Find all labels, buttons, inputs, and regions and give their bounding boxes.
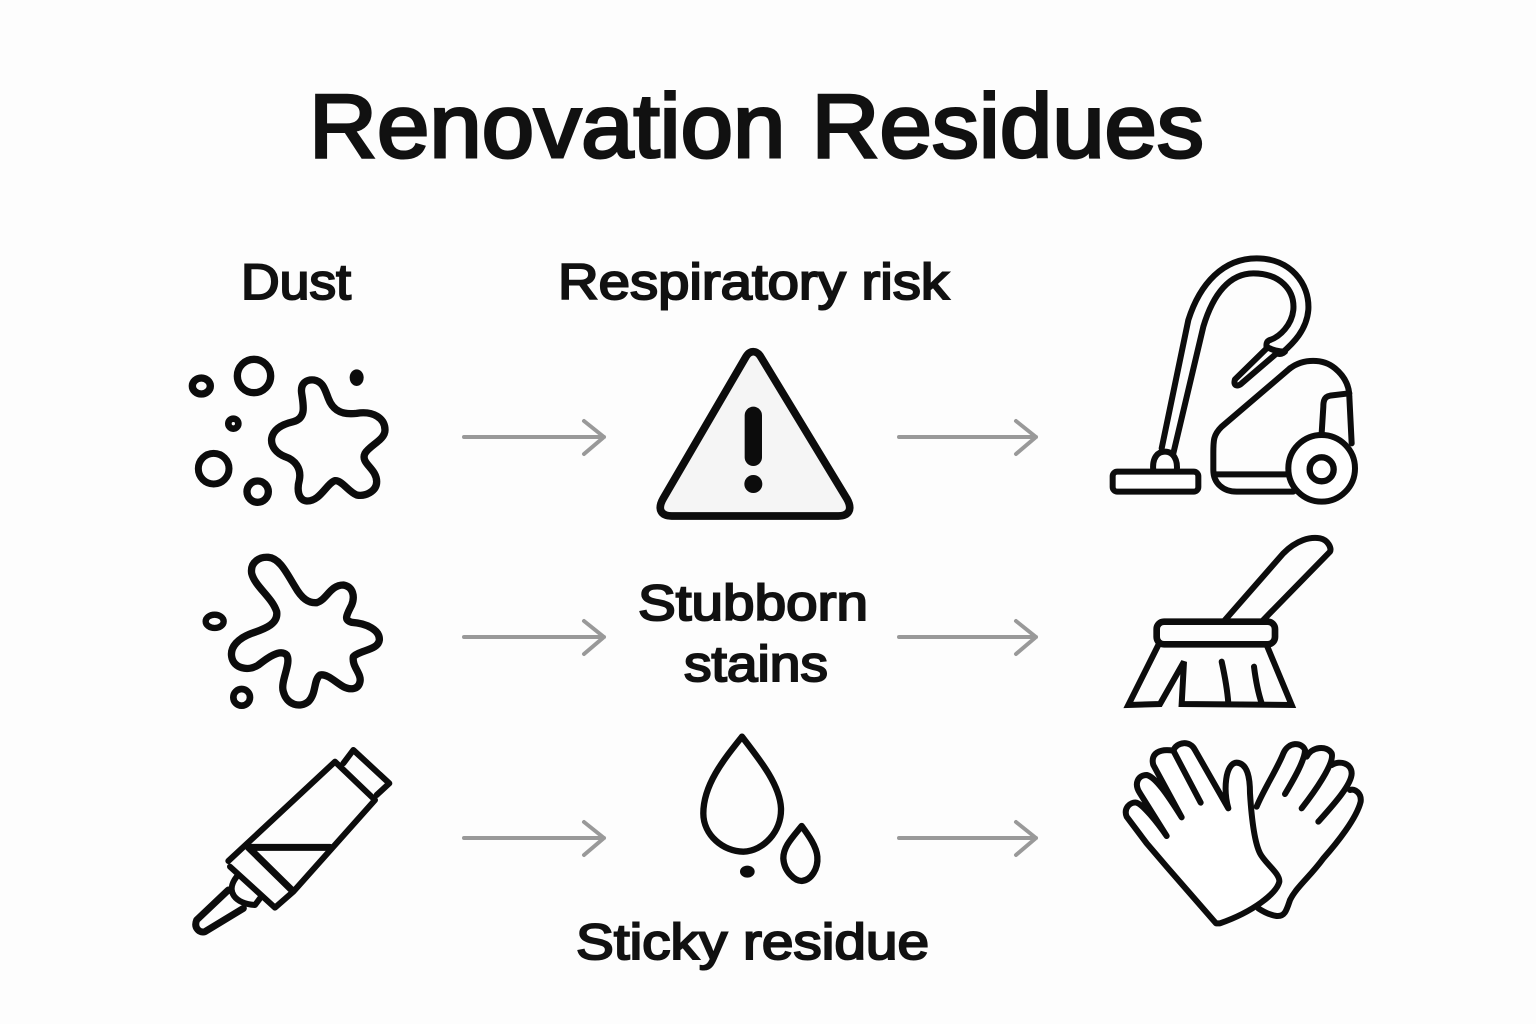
text block: Sticky residue: Sticky residue: [576, 914, 929, 970]
icon: glue tube: [196, 750, 389, 932]
arrow: residue row right: [899, 822, 1036, 855]
heading: Dust: Dust: [241, 254, 351, 310]
text block: Stubborn stains: stains: [684, 636, 828, 692]
heading: Respiratory risk: Respiratory risk: [558, 254, 950, 310]
arrow: stains row left: [464, 621, 604, 654]
arrow: risk to vacuum: [899, 421, 1036, 454]
arrow: stains row right: [899, 621, 1036, 654]
icon: gloves: [1126, 743, 1361, 923]
icon: dust particles: [192, 359, 385, 502]
icon: sticky drops: [703, 737, 817, 881]
arrow: dust to risk: [464, 421, 604, 454]
icon: stain splat: [206, 557, 379, 706]
icon: brush: [1128, 538, 1330, 705]
arrow: residue row left: [464, 822, 604, 855]
text block: Stubborn stains: [638, 575, 868, 692]
text block: Stubborn stains: Stubborn: [638, 575, 868, 631]
title: Renovation Residues: [309, 77, 1204, 177]
icon: vacuum cleaner: [1113, 258, 1355, 502]
icon: warning triangle: [660, 352, 850, 516]
